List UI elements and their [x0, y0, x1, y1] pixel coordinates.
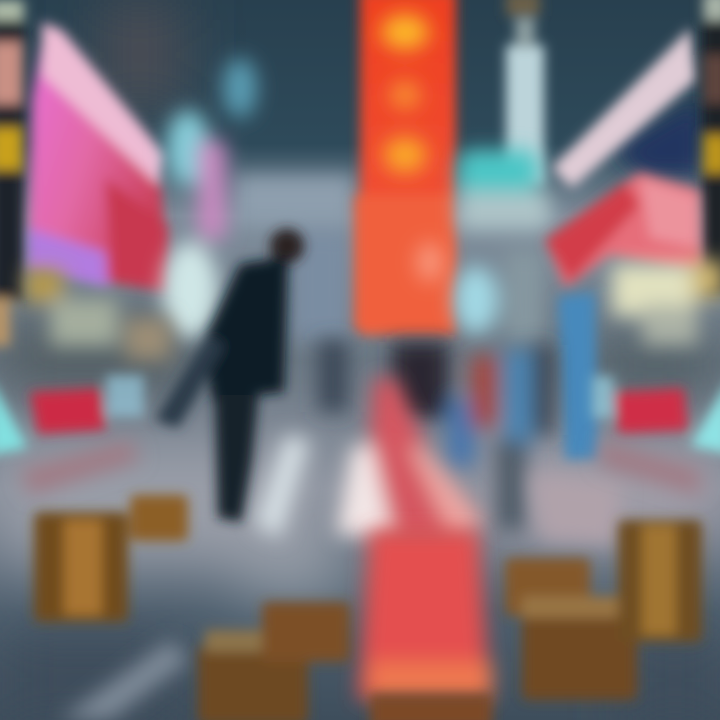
right cream storefront	[612, 260, 720, 345]
right teal and pale sign	[454, 150, 550, 340]
white tower	[506, 0, 544, 185]
road stripes	[255, 378, 620, 545]
tower lanterns	[381, 14, 444, 282]
red carpet	[358, 530, 492, 700]
blue pillar	[558, 292, 598, 460]
right red sign and cyan block	[592, 376, 720, 454]
right white flag	[552, 28, 696, 188]
left red sign and cyan block	[0, 375, 144, 455]
left light blue and pink panels	[162, 58, 257, 338]
pink flag sign left	[28, 22, 170, 292]
grey band behind person	[235, 175, 355, 340]
left storefront clutter	[25, 270, 171, 360]
right building column	[702, 0, 720, 292]
central orange tower	[354, 0, 456, 335]
wooden crates	[34, 495, 702, 720]
right red and pink sign	[545, 172, 702, 288]
person silhouette	[155, 229, 304, 522]
crowd figures centre	[318, 340, 552, 530]
road streaks	[20, 440, 700, 720]
left building column	[0, 0, 24, 346]
right navy panel	[615, 100, 700, 175]
